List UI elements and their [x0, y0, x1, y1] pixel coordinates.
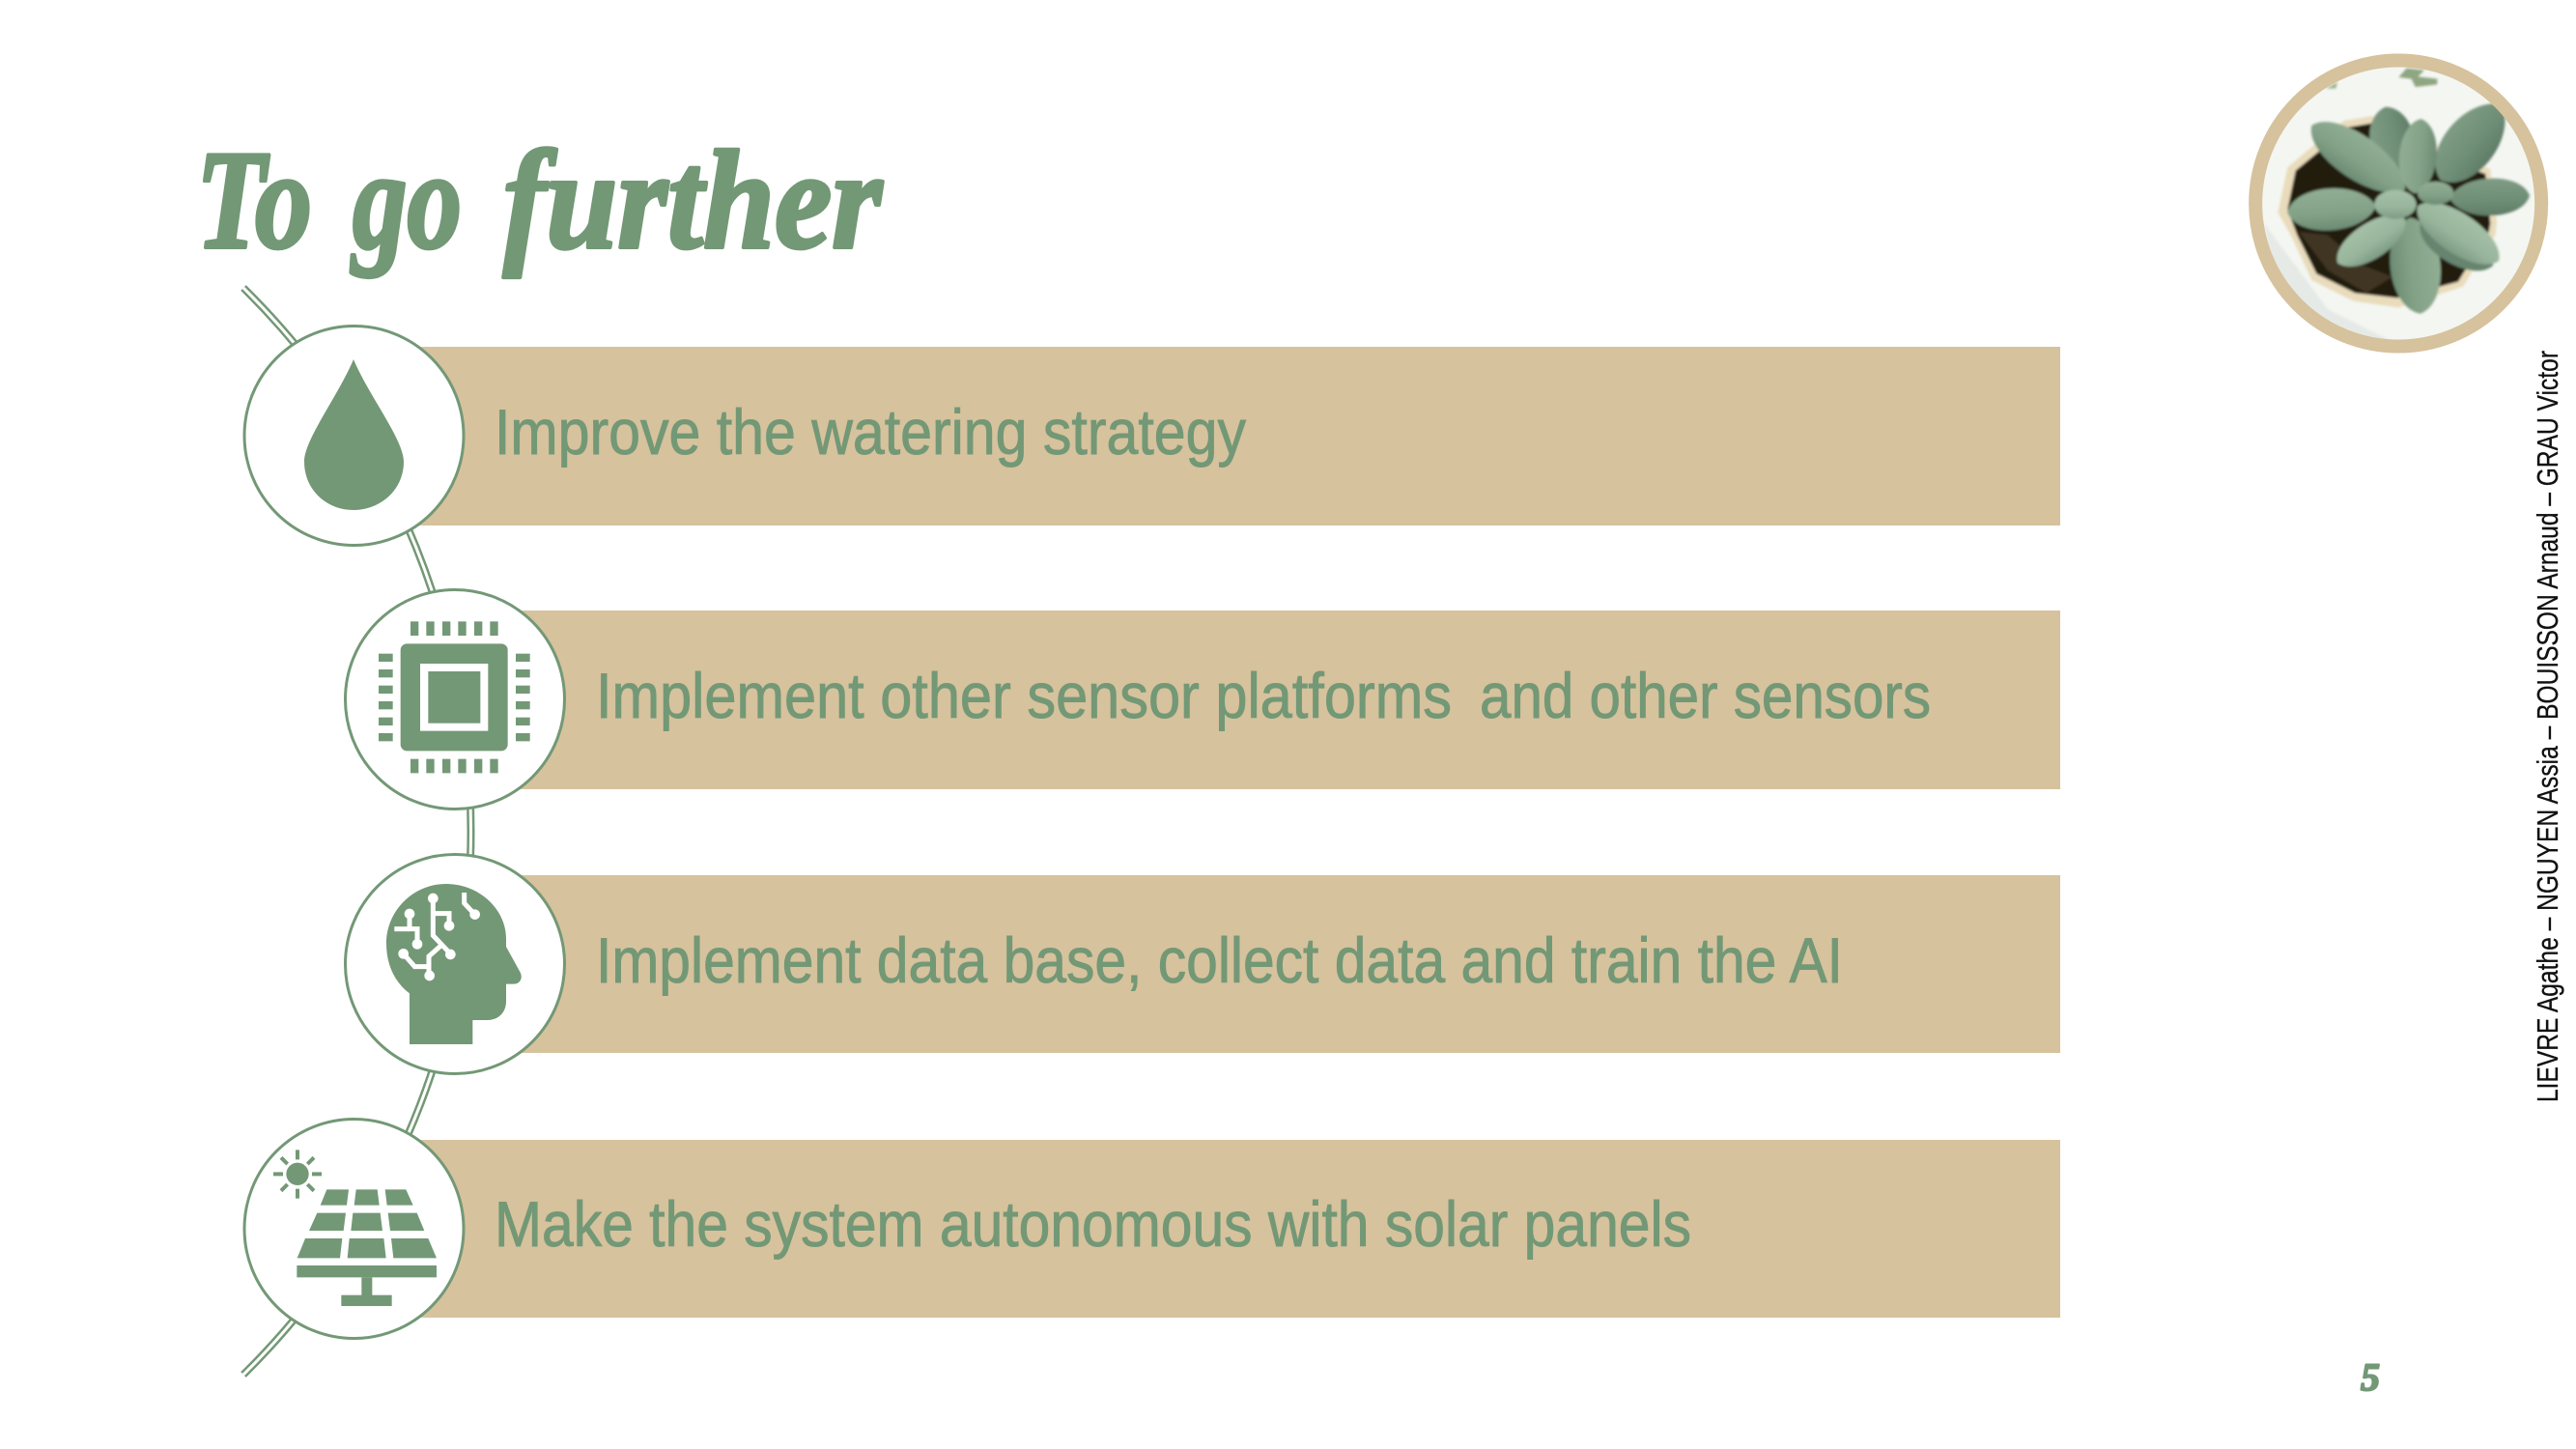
icon: water drop [304, 359, 404, 510]
text: watering strategy: Improve the watering strategy [495, 396, 1246, 468]
leaves, back to front [2434, 102, 2507, 185]
text: data base and AI: Implement data base, collect data and train the AI [596, 924, 1843, 996]
photo: succulent in round frame [2255, 60, 2541, 346]
title: go [351, 122, 462, 278]
band 4 [406, 1140, 2060, 1318]
icon: AI head [386, 884, 522, 1044]
text: sensor platforms: and other sensors [1480, 660, 1931, 731]
icon: solar panel [273, 1150, 437, 1306]
panel: solar panels [244, 1119, 2060, 1339]
panel: sensor platforms [346, 589, 2060, 810]
band 1 [406, 347, 2060, 526]
title: further [503, 122, 883, 278]
band 2 [507, 611, 2060, 789]
curved double-line connector [243, 288, 471, 1375]
icon circle 1 [244, 327, 464, 545]
title [196, 122, 883, 278]
text: sensor platforms: Implement other sensor platforms [596, 660, 1452, 731]
icon: microchip [379, 621, 530, 773]
icon circle 3 [346, 854, 564, 1074]
text: solar panels: Make the system autonomous with solar panels [495, 1188, 1691, 1260]
panel: data base and AI [346, 854, 2060, 1074]
authors vertical text: LIEVRE Agathe – NGUYEN Assia – BOUISSON Arnaud – GRAU Victor [2531, 351, 2564, 1102]
icon circle 4 [244, 1119, 464, 1339]
band 3 [507, 875, 2060, 1053]
title: To [196, 122, 312, 278]
icon circle 2 [346, 589, 564, 810]
page number: 5 [2361, 1355, 2380, 1399]
panel: improve watering [244, 327, 2060, 545]
